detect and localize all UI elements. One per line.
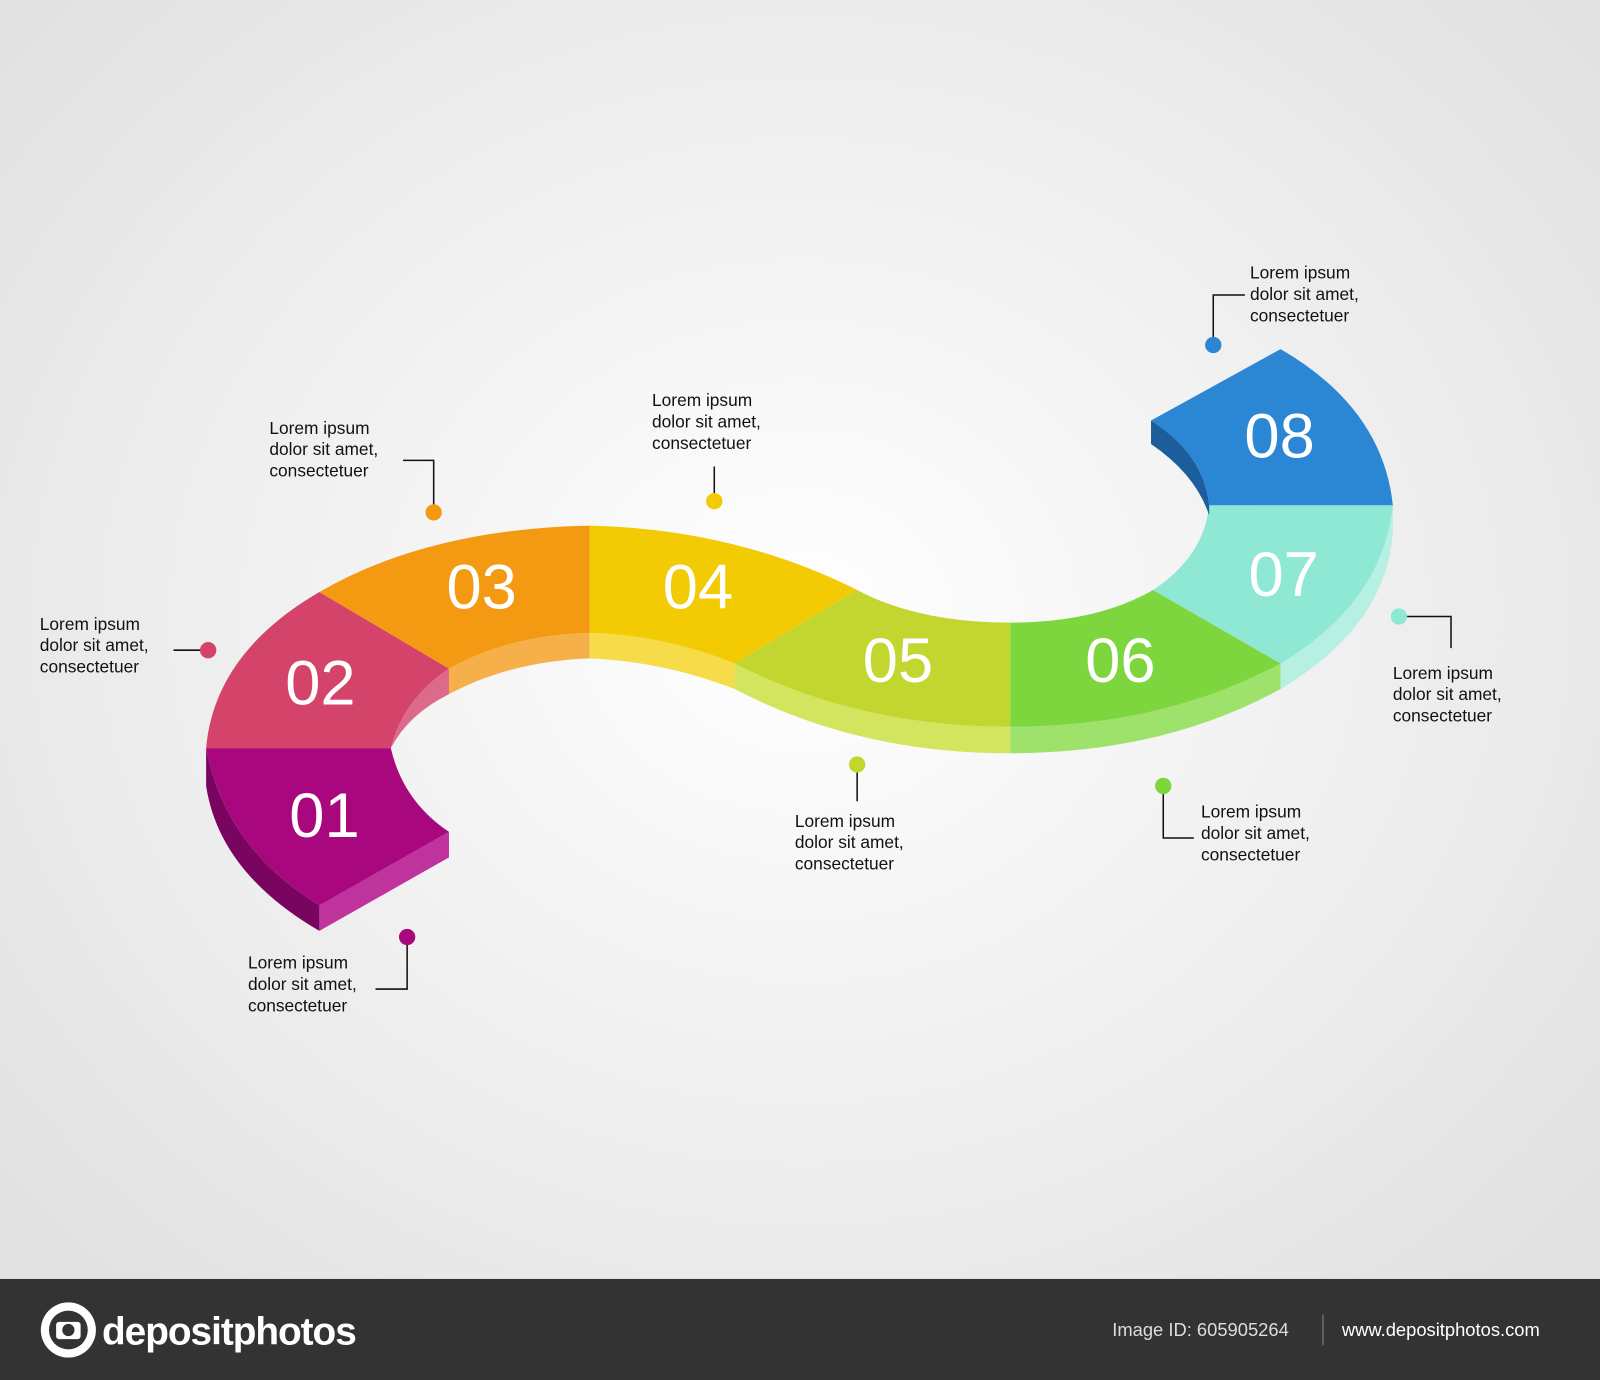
segment 05 (735, 590, 1010, 753)
callout 01: consectetuer (248, 996, 347, 1016)
callout 04: dolor sit amet, (652, 412, 761, 432)
footer bar (0, 1279, 1600, 1380)
callout 04: Lorem ipsum (652, 390, 752, 410)
callout 03: consectetuer (269, 461, 369, 481)
segment 08: 08 (1244, 401, 1315, 471)
segment 03: 03 (446, 552, 517, 622)
segment 05: 05 (863, 626, 933, 696)
callout 04: consectetuer (652, 433, 751, 453)
segment 01 (206, 748, 449, 931)
callout 05: Lorem ipsum (795, 811, 895, 831)
footer logo: depositphotos (102, 1310, 356, 1353)
callout 01: dolor sit amet, (248, 974, 357, 994)
callout 06 (1155, 778, 1310, 864)
segment 04: 04 (663, 552, 733, 622)
callout 06: dolor sit amet, (1201, 823, 1310, 843)
callout 02: consectetuer (40, 657, 139, 677)
callout 04 (652, 390, 761, 509)
segment 04 (590, 526, 857, 689)
callout 06: consectetuer (1201, 844, 1300, 864)
callout 03: dolor sit amet, (269, 439, 378, 459)
callout 08: dolor sit amet, (1250, 284, 1359, 304)
callout 08: consectetuer (1250, 306, 1349, 326)
ribbon chart (206, 349, 1393, 931)
callout 01 (248, 929, 415, 1016)
callout 03: Lorem ipsum (269, 418, 370, 438)
callout 02: Lorem ipsum (40, 614, 140, 634)
callout 02 (40, 614, 216, 677)
callout 07: consectetuer (1393, 706, 1492, 726)
segment 06: 06 (1085, 626, 1156, 696)
footer info (1112, 1315, 1540, 1345)
callout 07: dolor sit amet, (1393, 684, 1502, 704)
segment 02: 02 (285, 648, 356, 718)
callout 02: dolor sit amet, (40, 635, 149, 655)
callout 01: Lorem ipsum (248, 953, 348, 973)
segment 07: 07 (1248, 540, 1319, 610)
callout 05 (795, 756, 904, 874)
footer logo (41, 1302, 356, 1358)
callout 05: dolor sit amet, (795, 832, 904, 852)
callout 03 (269, 418, 442, 521)
callout 07 (1391, 608, 1502, 726)
segment 07 (1153, 505, 1393, 689)
segment 02 (206, 592, 449, 748)
callout 07: Lorem ipsum (1393, 663, 1493, 683)
segment 08 (1151, 349, 1393, 515)
segment 03 (319, 526, 590, 694)
callout 08: Lorem ipsum (1250, 263, 1350, 283)
footer info: www.depositphotos.com (1341, 1319, 1540, 1340)
callout 08 (1205, 263, 1359, 353)
callout 05: consectetuer (795, 854, 894, 874)
segment 06 (1010, 590, 1281, 753)
footer info: Image ID: 605905264 (1112, 1319, 1289, 1340)
segment 01: 01 (289, 781, 360, 851)
callout 06: Lorem ipsum (1201, 802, 1301, 822)
